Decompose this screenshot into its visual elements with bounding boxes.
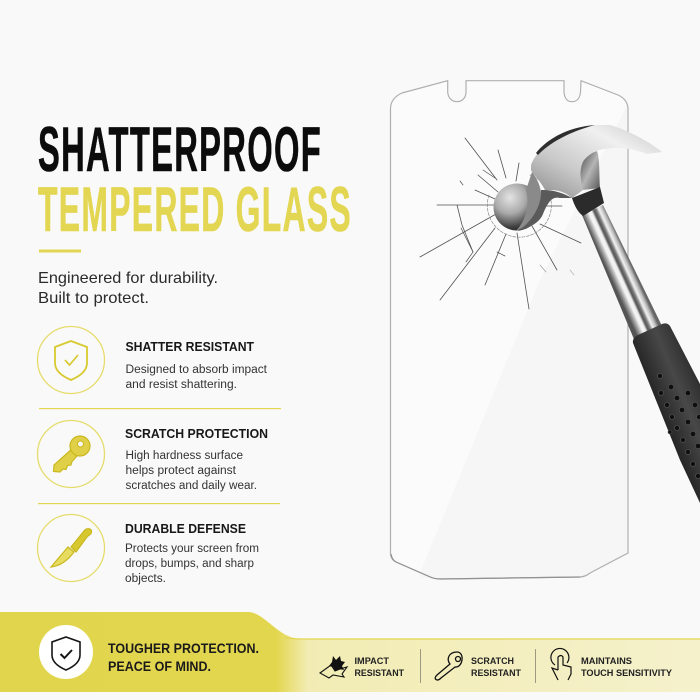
description <box>125 543 259 585</box>
label: TOUCH SENSITIVITY <box>581 668 673 679</box>
description: helps protect against <box>126 465 237 477</box>
hammer <box>494 125 700 503</box>
feature: shatter resistant <box>38 326 268 394</box>
hammer grip <box>633 323 700 503</box>
label: MAINTAINS <box>581 656 632 667</box>
title <box>38 115 352 245</box>
bottom banner <box>0 612 700 692</box>
description <box>126 450 257 492</box>
badge: scratch resistant <box>435 652 521 680</box>
description: Designed to absorb impact <box>126 364 268 376</box>
subtitle: Engineered for durability. <box>38 270 218 287</box>
icon: impact <box>320 656 347 678</box>
hammer head <box>531 125 662 198</box>
subtitle: Built to protect. <box>38 290 149 307</box>
banner message: TOUGHER PROTECTION. <box>108 641 259 656</box>
banner background <box>0 612 700 692</box>
feature: durable defense <box>38 514 259 585</box>
heading: SCRATCH PROTECTION <box>125 426 268 441</box>
feature: scratch protection <box>38 420 268 492</box>
subtitle <box>38 270 218 307</box>
icon: shield <box>38 326 104 394</box>
icon: key <box>38 420 104 488</box>
accent rule <box>39 250 81 252</box>
description: drops, bumps, and sharp <box>125 558 254 570</box>
description: High hardness surface <box>126 450 243 462</box>
hammer neck and face <box>494 184 540 230</box>
banner message: PEACE OF MIND. <box>108 659 211 674</box>
heading: SHATTER RESISTANT <box>126 339 254 354</box>
label: RESISTANT <box>354 668 404 679</box>
icon: touch hand <box>551 648 571 680</box>
title line 2: TEMPERED GLASS <box>38 175 352 245</box>
badge: touch sensitivity <box>551 648 673 680</box>
icon: knife <box>38 514 104 582</box>
heading: DURABLE DEFENSE <box>125 521 246 536</box>
shattered glass cracks <box>420 138 581 309</box>
label: RESISTANT <box>471 668 521 679</box>
hammer handle <box>582 205 662 344</box>
icon: key outline <box>435 652 462 680</box>
glass screen protector <box>390 81 628 579</box>
banner message <box>108 641 259 674</box>
icon: shield badge <box>39 625 93 679</box>
label <box>354 656 404 679</box>
label <box>471 656 521 679</box>
hammer collar <box>572 187 604 216</box>
description: Protects your screen from <box>125 543 259 555</box>
title line 1: SHATTERPROOF <box>38 115 322 185</box>
description: objects. <box>125 573 166 585</box>
label <box>581 656 673 679</box>
label: SCRATCH <box>471 656 514 667</box>
label: IMPACT <box>354 656 389 667</box>
description: and resist shattering. <box>126 379 237 391</box>
description: scratches and daily wear. <box>126 480 257 492</box>
badge: impact resistant <box>320 656 404 679</box>
description <box>126 364 268 391</box>
